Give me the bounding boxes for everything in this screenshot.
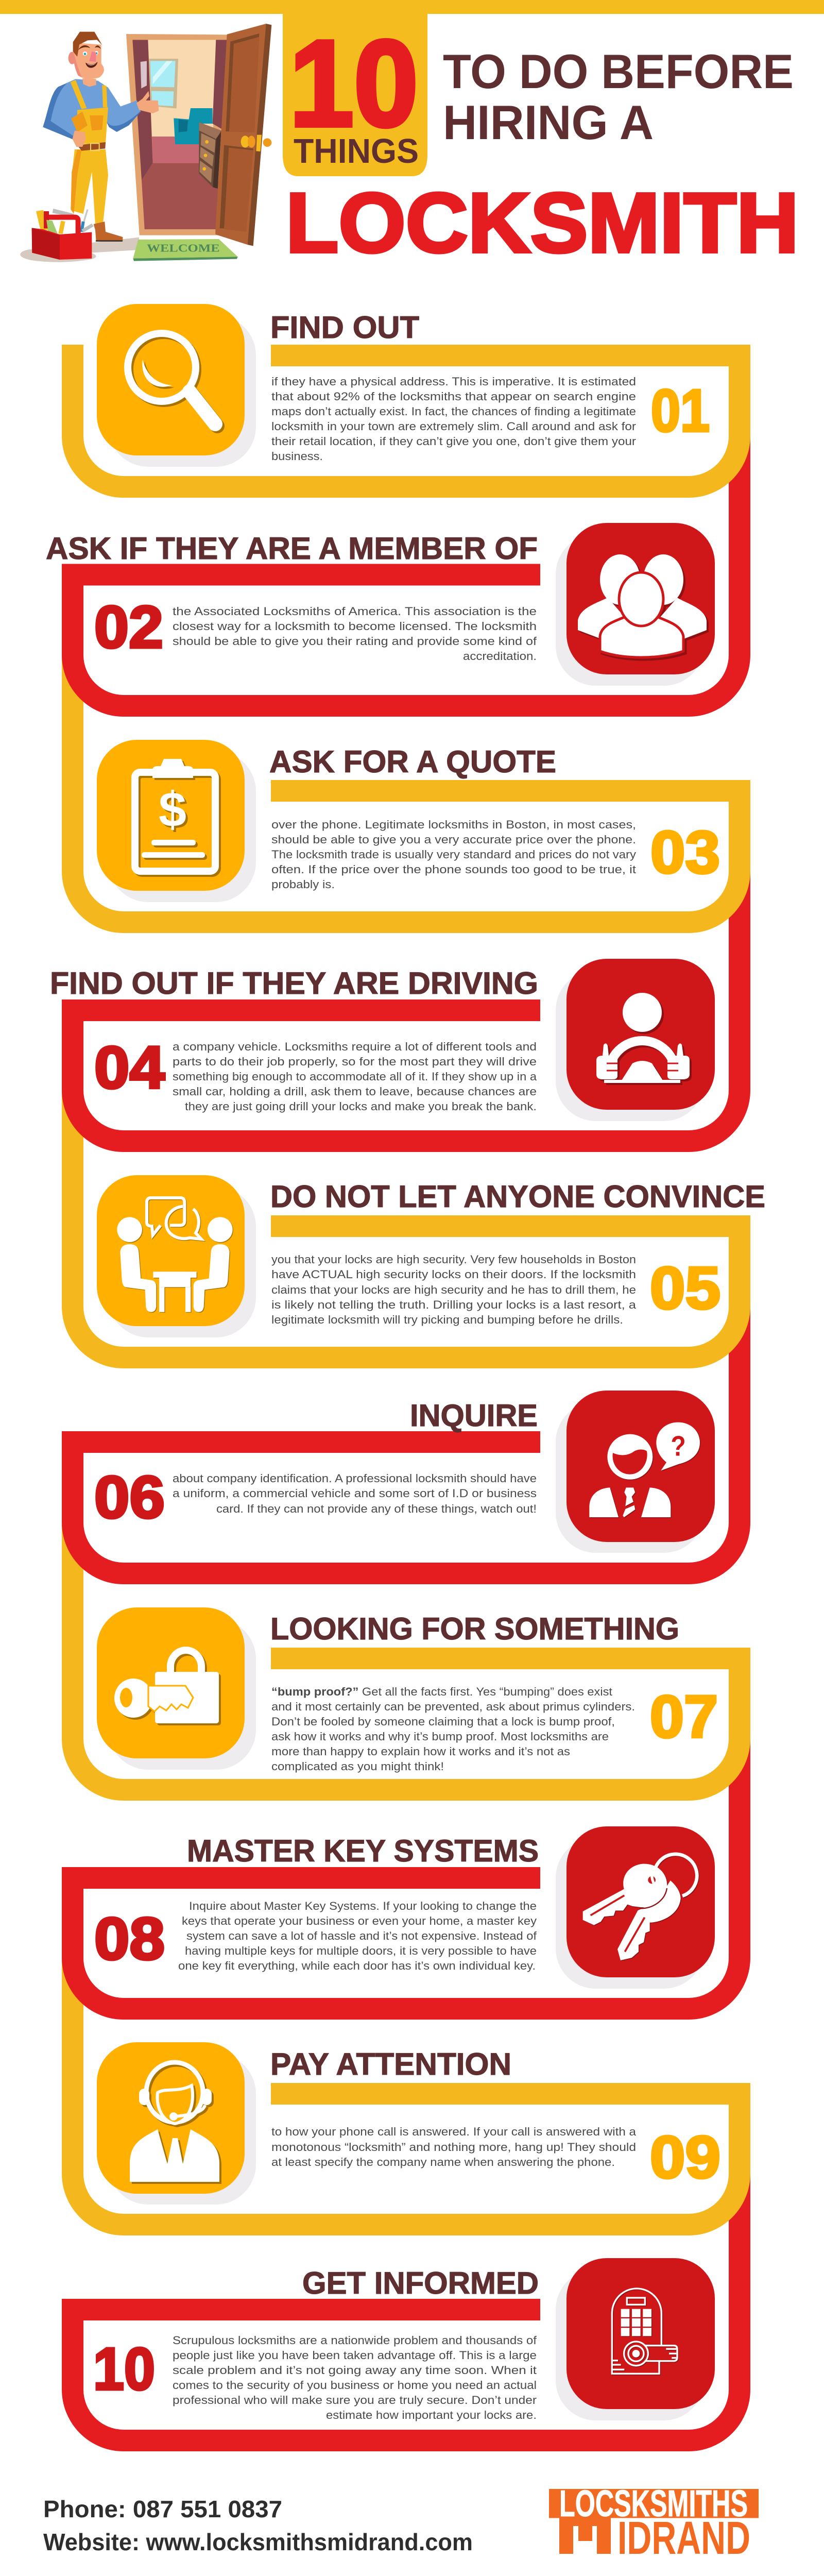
heading 1: FIND OUT: [270, 310, 419, 345]
text 3: [271, 818, 637, 891]
heading 5: DO NOT LET ANYONE CONVINCE: [270, 1179, 765, 1214]
text 1: that about 92% of the locksmiths that appear on search engine: [271, 390, 636, 403]
text 6: about company identification. A professional locksmith should have: [173, 1472, 537, 1485]
text 5: [271, 1253, 637, 1326]
panel: step 6: [73, 1307, 740, 1573]
logo: [549, 2483, 759, 2564]
frame 9: [73, 1958, 740, 2225]
text 7: complicated as you might think!: [271, 1760, 444, 1773]
text 10: Scrupulous locksmiths are a nationwide problem and thousands of: [173, 2334, 537, 2347]
title badge: [283, 10, 427, 176]
text 3: The locksmith trade is usually very standard and prices do not vary: [271, 848, 637, 861]
icon 3: clipboard with dollar: [97, 740, 256, 902]
website: Website: www.locksmithsmidrand.com: [43, 2529, 473, 2555]
text 8: system can save a lot of hassle and it’s not expensive. Instead of: [186, 1929, 537, 1942]
number 10: 10: [93, 2335, 155, 2402]
number 03: 03: [650, 819, 720, 886]
text 5: legitimate locksmith will try picking and bumping before he drills.: [271, 1313, 623, 1326]
text 3: over the phone. Legitimate locksmiths in Boston, in most cases,: [271, 818, 636, 831]
text 2: accreditation.: [463, 650, 537, 663]
frame 2: [73, 436, 740, 706]
heading 3: ASK FOR A QUOTE: [269, 744, 556, 779]
text 5: have ACTUAL high security locks on their doors. If the locksmith: [271, 1268, 636, 1281]
panel: step 5: [73, 1090, 765, 1358]
logo word idrand: IDRAND: [617, 2513, 750, 2564]
text 5: is likely not telling the truth. Drilling your locks is a last resort, a: [271, 1298, 637, 1311]
text 7: and it most certainly can be prevented, ask about primus cylinders.: [271, 1700, 635, 1713]
icon 3: clipboard with dollar: $: [159, 782, 186, 837]
text 3: probably is.: [271, 878, 335, 891]
frame 5: [73, 1090, 740, 1358]
text 3: should be able to give you a very accurate price over the phone.: [271, 833, 636, 846]
text 1: their retail location, if they can’t give you one, don’t give them your: [271, 435, 637, 448]
text 6: a uniform, a commercial vehicle and some sort of I.D or business: [173, 1487, 537, 1500]
panel: step 1: [73, 304, 740, 487]
heading 9: PAY ATTENTION: [270, 2046, 511, 2081]
icon 6: person with question: [556, 1391, 715, 1553]
illustration: locksmith at open door: [20, 24, 271, 262]
text 7: “bump proof?” Get all the facts first. Yes “bumping” does exist: [271, 1685, 613, 1698]
door frame and room: [126, 34, 228, 235]
icon 2: group of people: [556, 523, 715, 686]
logo M block: [559, 2518, 611, 2554]
frame 4: [73, 871, 740, 1141]
title number 10: 10: [289, 15, 418, 152]
text 9: to how your phone call is answered. If your call is answered with a: [271, 2125, 637, 2138]
text 8: Inquire about Master Key Systems. If your looking to change the: [189, 1900, 537, 1912]
phone: Phone: 087 551 0837: [43, 2496, 282, 2522]
text 6: [173, 1472, 537, 1515]
number 07: 07: [650, 1683, 718, 1750]
frame 10: [73, 2174, 740, 2441]
text 7: more than happy to explain how it works and it’s not as: [271, 1745, 570, 1758]
text 1: [271, 375, 637, 463]
text 1: locksmith in your town are extremely slim. Call around and ask for: [271, 420, 637, 433]
frame 7: [73, 1522, 740, 1790]
heading 2: ASK IF THEY ARE A MEMBER OF: [46, 531, 538, 566]
welcome mat: [133, 239, 238, 261]
icon 8: keys: [556, 1826, 715, 1989]
text 5: claims that your locks are high security and he has to drill them, he: [271, 1283, 636, 1296]
heading 8: MASTER KEY SYSTEMS: [187, 1833, 539, 1868]
text 10: people just like you have been taken advantage off. This is a large: [173, 2349, 537, 2362]
title word things: THINGS: [294, 132, 419, 171]
number 06: 06: [94, 1464, 165, 1531]
heading 10: GET INFORMED: [302, 2265, 539, 2300]
text 4: something big enough to accommodate all of it. If they show up in a: [173, 1070, 537, 1083]
panel: step 10: [73, 2174, 740, 2441]
panel: step 3: [73, 655, 740, 922]
open door: [215, 24, 271, 246]
number 09: 09: [650, 2124, 720, 2191]
icon 10: keypad door lock: [556, 2258, 715, 2420]
text 2: closest way for a locksmith to become licensed. The locksmith: [173, 620, 537, 633]
text 3: often. If the price over the phone sounds too good to be true, it: [271, 863, 637, 876]
floor shadow: [20, 238, 139, 262]
title word locksmith: LOCKSMITH: [286, 176, 799, 270]
text 7: [271, 1685, 635, 1773]
text 10: comes to the security of you business or home you need an actual: [173, 2379, 537, 2392]
top bar: [0, 0, 824, 14]
text 1: if they have a physical address. This is imperative. It is estimated: [271, 375, 636, 388]
icon 1: magnifying glass: [97, 304, 256, 467]
text 2: should be able to give you their rating and provide some kind of: [173, 635, 537, 648]
number 08: 08: [94, 1905, 165, 1972]
text 8: one key fit everything, while each door has it’s own individual key.: [178, 1959, 536, 1972]
text 9: [271, 2125, 637, 2168]
text 8: having multiple keys for multiple doors, it is very possible to have: [185, 1944, 537, 1957]
text 4: they are just going drill your locks and make you break the bank.: [185, 1100, 537, 1113]
text 4: parts to do their job properly, so for the most part they will drive: [173, 1055, 537, 1068]
text 5: you that your locks are high security. Very few households in Boston: [271, 1253, 636, 1266]
heading 6: INQUIRE: [410, 1398, 538, 1433]
panel: step 8: [73, 1739, 740, 2009]
text 10: scale problem and it’s not going away any time soon. When it: [173, 2364, 537, 2377]
heading 4: FIND OUT IF THEY ARE DRIVING: [50, 965, 538, 1001]
frame 1: [73, 345, 740, 487]
icon 6: person with question: ?: [671, 1430, 686, 1462]
frame 8: [73, 1739, 740, 2009]
footer contact: [43, 2496, 473, 2555]
panel: step 4: [50, 871, 740, 1141]
text 10: estimate how important your locks are.: [326, 2409, 537, 2421]
logo word locksmiths: LOCSKSMITHS: [559, 2483, 748, 2524]
text 9: monotonous “locksmith” and nothing more, hang up! They should: [271, 2141, 636, 2154]
icon 4: driver with steering wheel: [556, 959, 715, 1121]
icon 9: call agent: [97, 2042, 256, 2205]
text 6: card. If they can not provide any of these things, watch out!: [216, 1502, 537, 1515]
frame 6: [73, 1307, 740, 1573]
text 4: a company vehicle. Locksmiths require a lot of different tools and: [173, 1040, 537, 1053]
title line hiring a: HIRING A: [443, 95, 654, 149]
text 4: small car, holding a drill, ask them to leave, because chances are: [173, 1085, 537, 1098]
number 02: 02: [94, 594, 163, 660]
toolbox: [32, 209, 93, 260]
heading 7: LOOKING FOR SOMETHING: [270, 1611, 679, 1646]
text 8: keys that operate your business or even your home, a master key: [182, 1914, 537, 1927]
panel: step 9: [73, 1958, 740, 2225]
panel: step 7: [73, 1522, 740, 1790]
text 1: maps don’t actually exist. In fact, the chances of finding a legitimate: [271, 405, 636, 418]
welcome mat: WELCOME: [147, 243, 220, 254]
text 9: at least specify the company name when answering the phone.: [271, 2156, 615, 2168]
title line to do before: TO DO BEFORE: [443, 44, 794, 98]
title block: [283, 10, 799, 270]
number 05: 05: [650, 1255, 720, 1321]
text 8: [178, 1900, 537, 1972]
text 7: ask how it works and why it’s bump proof. Most locksmiths are: [271, 1730, 609, 1743]
icon 7: key and padlock: [97, 1607, 256, 1770]
text 2: the Associated Locksmiths of America. This association is the: [173, 605, 537, 618]
icon 5: two people talking: [97, 1175, 256, 1337]
number 04: 04: [94, 1034, 165, 1101]
text 1: business.: [271, 450, 323, 463]
panel: step 2: [46, 436, 740, 706]
man: [43, 32, 159, 242]
text 4: [173, 1040, 537, 1113]
number 01: 01: [651, 377, 710, 444]
text 10: [173, 2334, 537, 2421]
text 7: Don’t be fooled by someone claiming that a lock is bump proof,: [271, 1715, 615, 1728]
text 2: [173, 605, 537, 663]
frame 3: [73, 655, 740, 922]
text 10: professional who will make sure you are truly secure. Don’t under: [173, 2394, 537, 2406]
